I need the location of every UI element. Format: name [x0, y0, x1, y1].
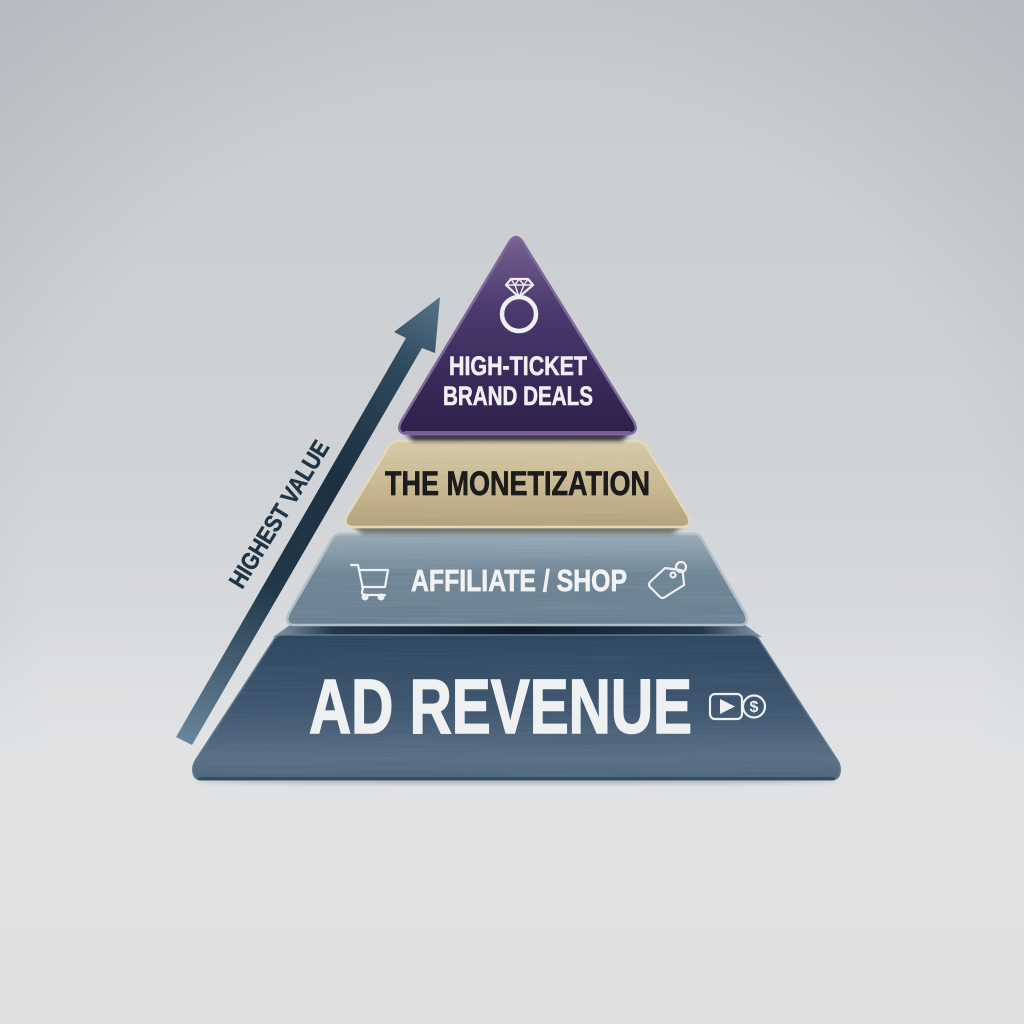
tier 4: high-ticket brand deals: [399, 237, 636, 441]
arrow label: HIGHEST VALUE: [224, 436, 335, 593]
arrow: highest value: [176, 297, 440, 745]
tier 2 label: AFFILIATE / SHOP: [411, 563, 627, 598]
tier 4 label: [443, 351, 593, 411]
icon: price tag: [649, 562, 686, 598]
icon: video and dollar: [710, 694, 765, 719]
icon: cart: [351, 565, 388, 599]
tier 1: ad revenue: [190, 625, 845, 784]
tier 2: affiliate / shop: [287, 534, 747, 625]
tier 3 label: THE MONETIZATION: [385, 465, 650, 503]
tier 4 label: BRAND DEALS: [443, 381, 593, 411]
tier 3: the monetization: [345, 441, 690, 534]
icon: diamond ring: [502, 279, 536, 331]
pyramid: [190, 237, 845, 784]
icon: video and dollar: $: [750, 699, 759, 716]
tier 4 label: HIGH-TICKET: [449, 351, 587, 381]
tier 1 label: AD REVENUE: [309, 664, 692, 750]
